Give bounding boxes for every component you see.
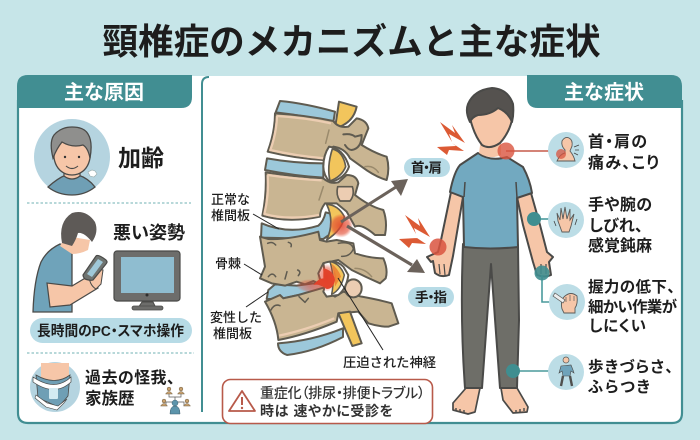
disc 1 [276, 101, 335, 122]
inflammation glow upper [329, 214, 353, 238]
disc 2 [265, 158, 323, 178]
panel: causes [17, 75, 194, 414]
text: numbness [588, 195, 652, 255]
label: bad posture: 悪い姿勢 [113, 223, 185, 243]
icon: neck pain [548, 132, 584, 168]
icon: person with smartphone [33, 212, 107, 312]
disc 3 [261, 212, 338, 239]
pill: long PC and phone use [30, 318, 192, 343]
icon: hand gripping wrench [549, 284, 585, 320]
text: walking difficulty [588, 358, 673, 396]
label: aging: 加齢 [118, 145, 164, 171]
hair [467, 88, 513, 122]
panel header: symptoms: 主な症状 [564, 81, 644, 104]
callout: seek medical care [222, 380, 432, 424]
text: numbness: 手や腕の [588, 195, 652, 214]
vertebra 1 [268, 113, 388, 180]
label: past injury and family history [85, 368, 175, 408]
label: degenerated disc [210, 292, 268, 341]
shirt [450, 153, 532, 248]
text: neck and shoulder pain: 痛み、こり [588, 153, 659, 172]
disc lower [278, 328, 343, 355]
callout: seek medical care: 時は 速やかに受診を [260, 403, 393, 419]
icon: lightning bolts at neck [437, 122, 465, 155]
pill: long PC and phone use: 長時間のPC・スマホ操作 [37, 322, 184, 340]
icon: numb hand [548, 202, 584, 238]
text: weak grip [588, 277, 678, 335]
panel header: symptoms [527, 75, 682, 108]
marker: hand pain [430, 238, 446, 256]
marker: arm numbness [527, 212, 550, 226]
nerve lower [338, 312, 362, 346]
text: weak grip: 握力の低下、 [588, 277, 675, 296]
arrow: to hand and fingers [347, 226, 425, 273]
label: degenerated disc: 変性した [210, 310, 262, 325]
facet ball [345, 279, 362, 297]
text: weak grip: 細かい作業が [588, 297, 678, 316]
icon: neck collar [30, 362, 80, 412]
foramen 2 [323, 147, 349, 182]
icon: monitor [114, 251, 180, 310]
vertebra 3 with osteophytes [260, 232, 387, 286]
marker: gait trouble [506, 364, 550, 378]
text: walking difficulty: 歩きづらさ、 [588, 358, 673, 376]
text: numbness: しびれ、 [589, 217, 643, 235]
icon: unsteady walking [548, 354, 584, 390]
causes header: 主な原因 [64, 81, 144, 104]
label: compressed nerve: 圧迫された神経 [343, 355, 436, 370]
label: degenerated disc: 椎間板 [213, 326, 252, 341]
text: numbness: 感覚鈍麻 [588, 236, 652, 255]
right foot [501, 388, 528, 413]
foramen 2b yellow [327, 204, 344, 240]
label: normal disc: 正常な [211, 192, 250, 207]
label: osteophyte [215, 256, 262, 275]
label: past injury and family history: 家族歴 [85, 388, 135, 408]
callout line: normal disc [253, 214, 279, 229]
neck [479, 138, 501, 157]
pill: neck and shoulder: 首・肩 [411, 160, 442, 176]
vertebra 2 [262, 172, 386, 235]
text: walking difficulty: ふらつき [588, 378, 650, 396]
vertebra 4 with process [265, 288, 398, 340]
pill: hand and fingers [408, 287, 454, 307]
text: weak grip: しにくい [589, 317, 646, 335]
callout: seek medical care: 重症化（排尿・排便トラブル） [260, 385, 425, 401]
nerve 1 [335, 102, 357, 128]
left arm and hand [427, 192, 463, 276]
label: past injury and family history: 過去の怪我、 [85, 368, 175, 387]
right arm and hand [517, 193, 553, 276]
pants [462, 244, 519, 388]
label: osteophyte: 骨棘 [215, 256, 241, 271]
marker: grip weakness [534, 266, 550, 302]
chart: spine cross-section [260, 101, 398, 355]
main white panel [18, 76, 682, 423]
icon: family tree [160, 387, 190, 414]
pill: hand and fingers: 手・指 [415, 289, 448, 305]
text: neck and shoulder pain: 首・肩の [588, 132, 647, 151]
icon: elderly person [34, 119, 110, 195]
face [470, 102, 512, 147]
title: 頸椎症のメカニズムと主な症状 [102, 22, 601, 62]
foramen 3 compressed nerve [296, 261, 348, 297]
causes header [17, 75, 192, 108]
arrow: to neck and shoulder [341, 179, 408, 222]
icon: lightning bolts at hand [399, 215, 430, 248]
label: compressed nerve [338, 278, 436, 370]
degenerated disc [267, 282, 327, 299]
marker: neck pain [498, 142, 550, 160]
left foot [453, 388, 480, 414]
pill: neck and shoulder [404, 158, 450, 177]
text: neck and shoulder pain [588, 132, 659, 172]
icon: warning triangle [229, 391, 255, 411]
label: normal disc: 椎間板 [211, 208, 250, 223]
label: normal disc [211, 192, 250, 223]
body figure [427, 88, 553, 414]
